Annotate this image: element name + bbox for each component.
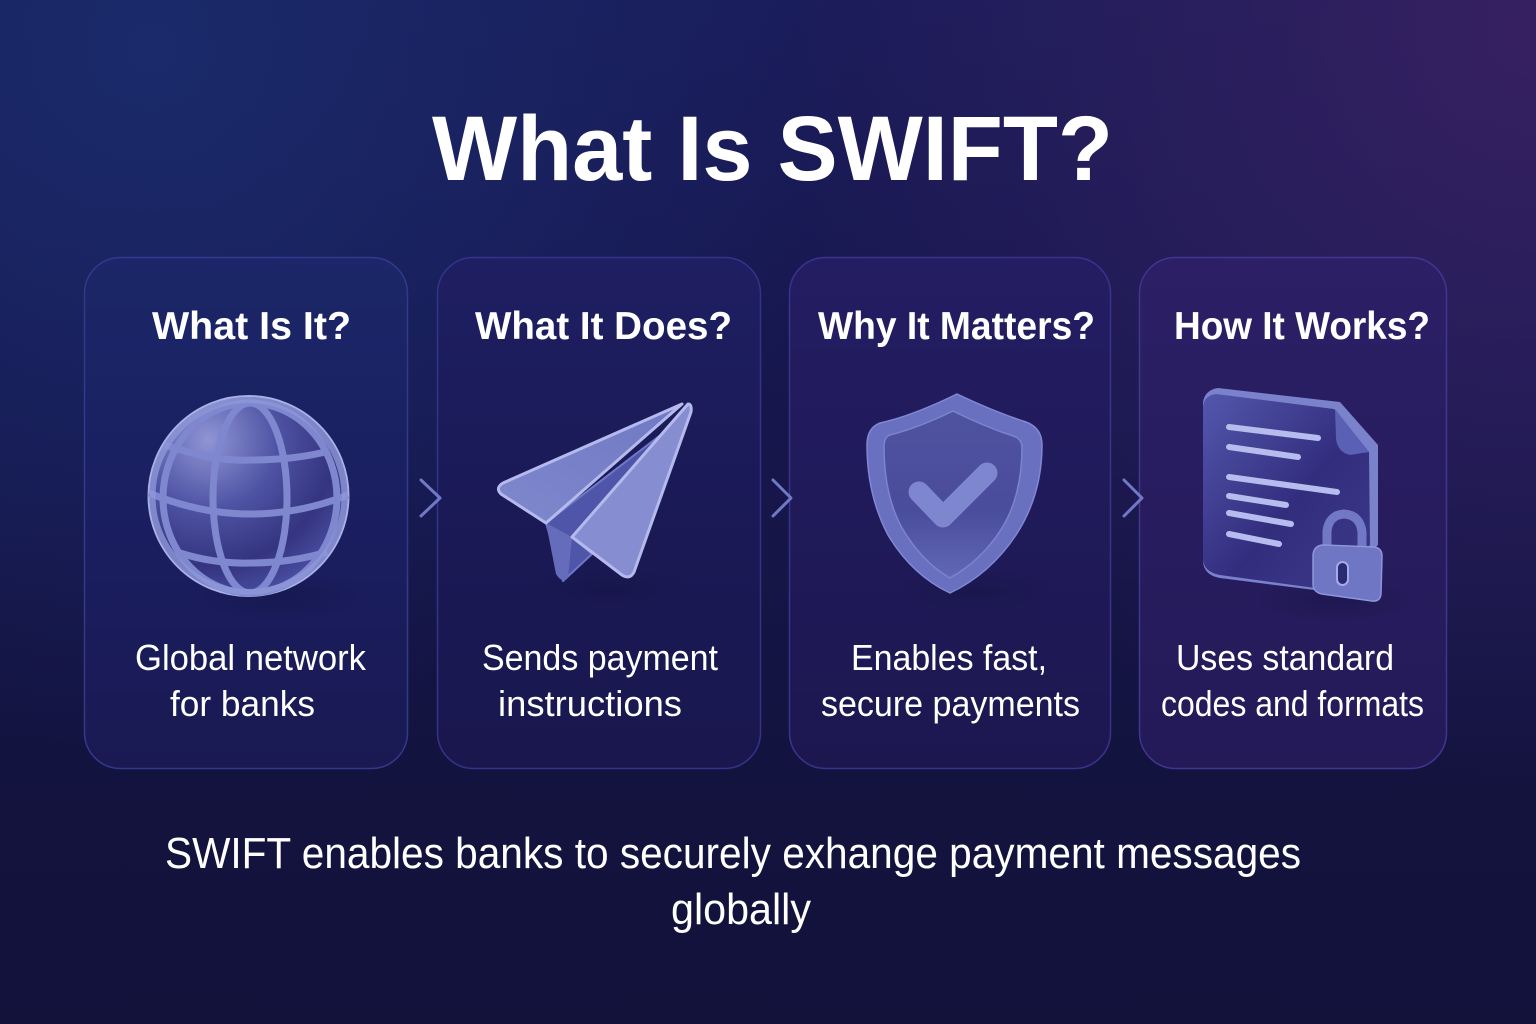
icon: paper plane xyxy=(498,404,695,612)
icon: shield with check xyxy=(867,394,1060,614)
summary text xyxy=(165,829,1301,934)
body text: what it does: instructions xyxy=(498,683,682,724)
panel: why it matters xyxy=(790,258,1110,768)
heading: what is it: What Is It? xyxy=(152,305,351,348)
heading: what it does: What It Does? xyxy=(475,305,732,348)
document text lines xyxy=(1229,427,1337,544)
heading: why it matters: Why It Matters? xyxy=(818,305,1095,348)
summary text: globally xyxy=(671,885,811,934)
body text: how it works: codes and formats xyxy=(1161,683,1424,724)
arrow: three to four xyxy=(1124,480,1142,516)
body text: what is it xyxy=(135,637,367,724)
body text: what is it: Global network xyxy=(135,637,367,678)
arrow: two to three xyxy=(773,480,791,516)
summary text: SWIFT enables banks to securely exhange payment messages xyxy=(165,829,1301,878)
body text: how it works xyxy=(1161,637,1424,724)
panel: what is it xyxy=(84,258,408,768)
icon: globe xyxy=(148,396,370,620)
title: What Is SWIFT? xyxy=(432,98,1113,200)
body text: what it does xyxy=(482,637,718,724)
body text: why it matters xyxy=(821,637,1080,724)
body text: what is it: for banks xyxy=(170,683,315,724)
heading: how it works: How It Works? xyxy=(1174,305,1430,348)
body text: why it matters: secure payments xyxy=(821,683,1080,724)
panel: how it works xyxy=(1140,258,1446,768)
body text: how it works: Uses standard xyxy=(1176,637,1394,678)
body text: why it matters: Enables fast, xyxy=(851,637,1047,678)
body text: what it does: Sends payment xyxy=(482,637,718,678)
arrow: one to two xyxy=(421,480,440,516)
panel: what it does xyxy=(438,258,760,768)
icon: document with padlock xyxy=(1203,388,1420,622)
padlock xyxy=(1313,514,1382,601)
